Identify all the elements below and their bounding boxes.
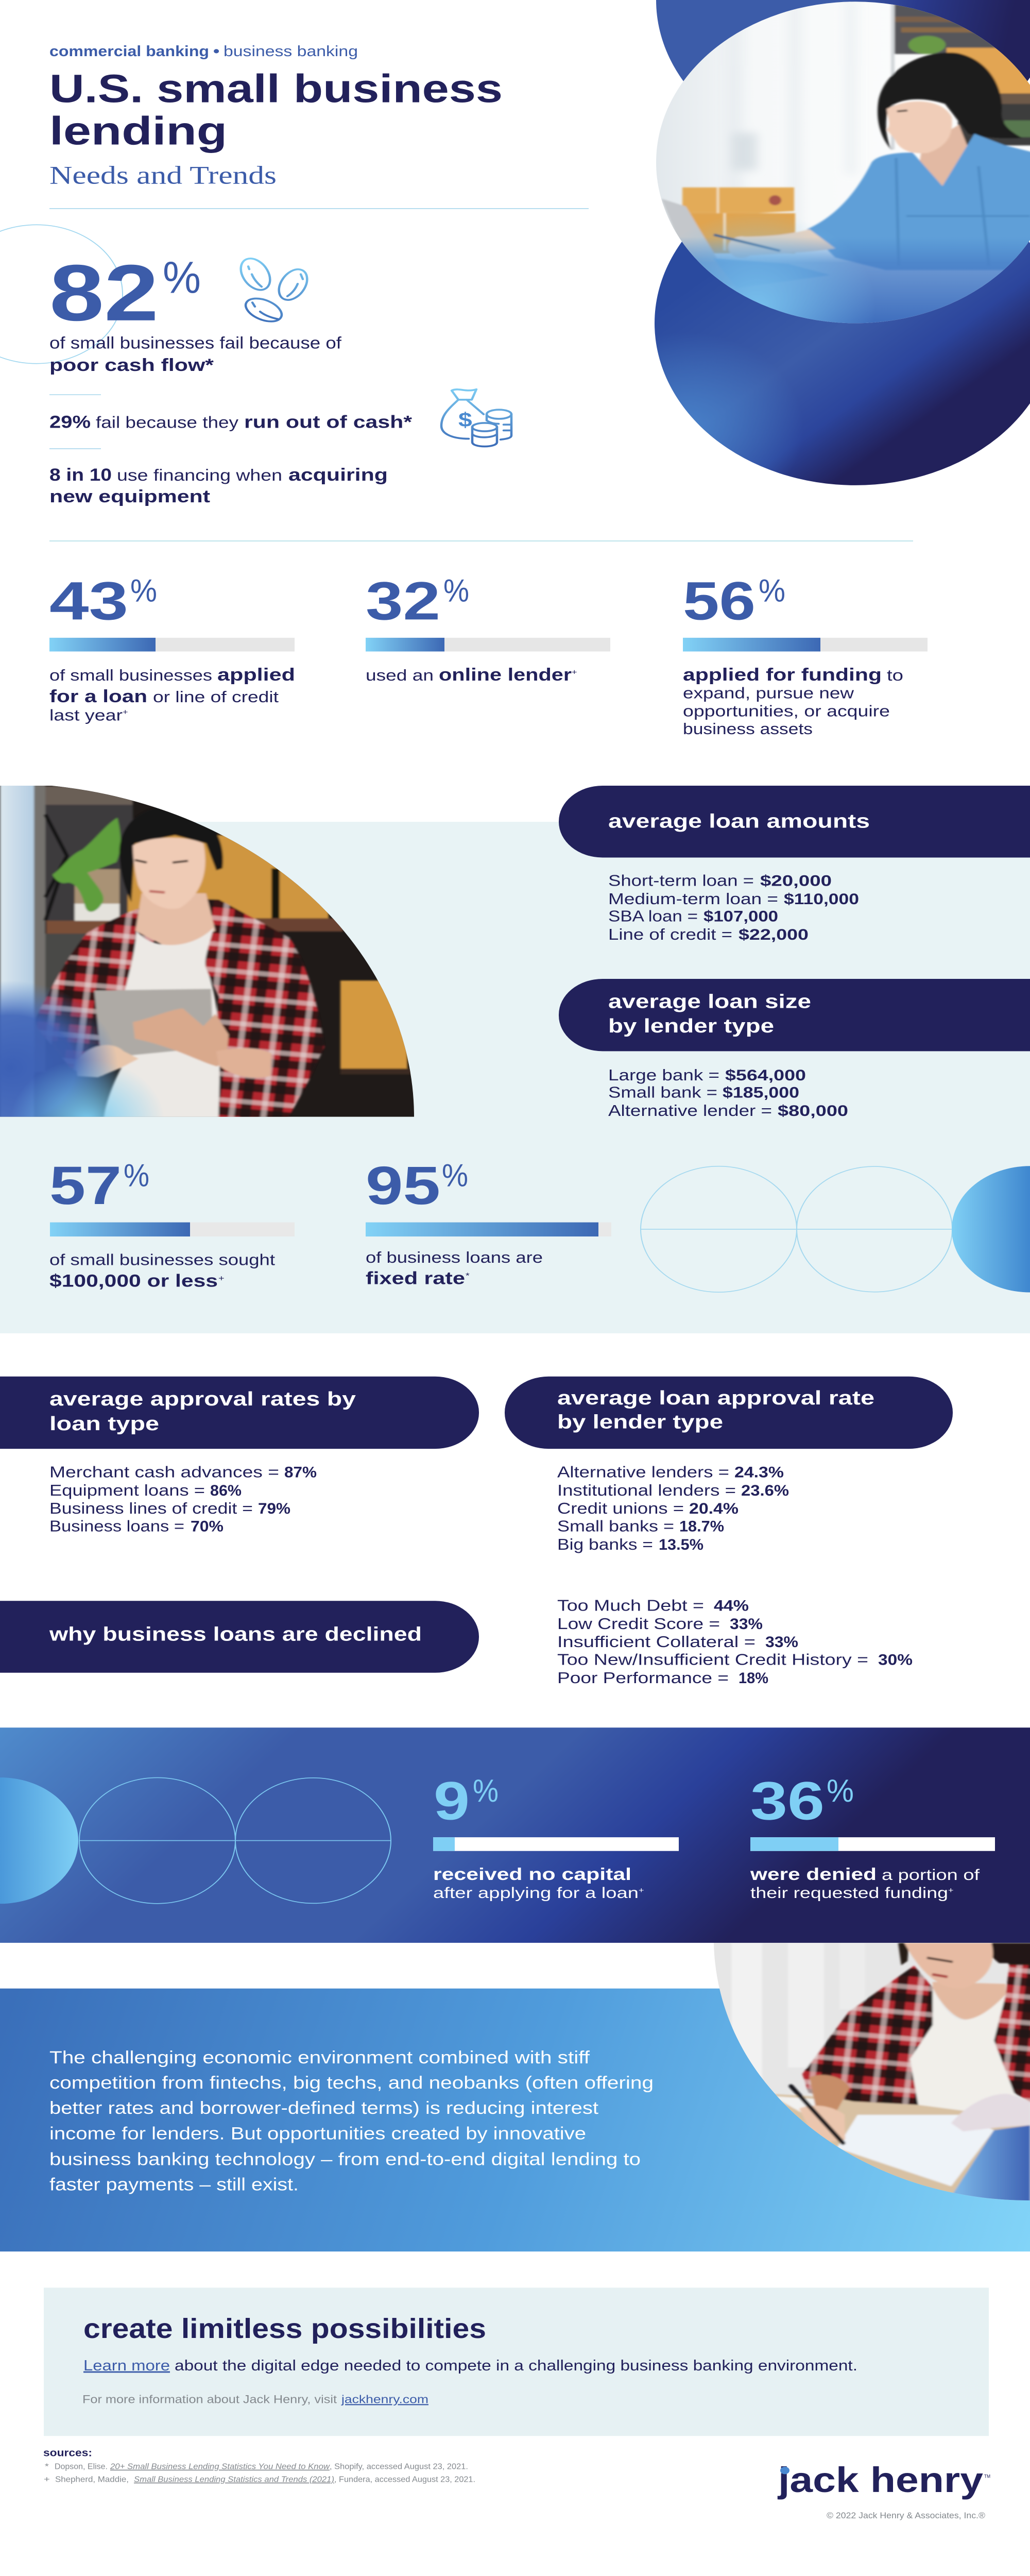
stat: 57%: 57 [49,1156,122,1216]
progress bar 9% [433,1837,679,1851]
laptop [661,199,726,285]
heading pill: average loan approval rate by lender type: by lender type [557,1411,723,1433]
paragraph text: faster payments – still exist. [49,2175,299,2195]
sources: sources: [43,2447,92,2459]
list: approval rates by lender type: Institutional lenders = [557,1482,736,1499]
curtain [0,781,34,1117]
list: average loan amounts [608,872,859,943]
stat: 8 in 10: 8 in 10 [49,465,112,485]
stat: 9%: + [639,1887,644,1895]
list: average loan size: $564,000 [725,1067,806,1084]
list: approval rates by lender type: 23.6% [741,1482,789,1499]
forearm [810,2075,850,2111]
stat: 43%: or line of credit [153,688,279,706]
sources: Small Business Lending Statistics and Trends (2021) [134,2475,334,2484]
paragraph text: income for lenders. But opportunities created by innovative [49,2124,586,2143]
heading pill: average loan size by lender type: by lender type [608,1015,774,1037]
subtitle: Needs and Trends [49,161,277,190]
plaid shirt right [994,1961,1030,2103]
stat: 56%: applied for funding [683,665,882,685]
list: approval rates by loan type: Business lines of credit = [49,1500,253,1517]
blue circle top [656,0,1030,161]
blue circle bottom [655,242,1030,485]
stat: 57%: + [218,1274,225,1283]
stat: 95%: % [442,1157,468,1193]
list: approval rates by loan type: 87% [284,1464,317,1481]
stat: 36%: their requested funding [750,1885,948,1902]
sources: , Shopify, accessed August 23, 2021. [330,2462,468,2471]
list: average loan amounts: Medium-term loan = [608,890,778,908]
paragraph text: business banking technology – from end-to-end digital lending to [49,2149,641,2169]
plaid shirt left [35,906,154,1076]
list: approval rates by lender type: Big banks = [557,1536,653,1553]
stat: 8 in 10: acquiring [288,465,388,485]
stat: 8 in 10: new equipment [49,487,210,506]
panel: blue gradient paragraph [0,1989,1030,2251]
sources [43,2447,475,2484]
contact line: For more information about Jack Henry, visit [82,2394,337,2406]
decorative circles left [0,1777,391,1904]
stat: 43%: applied [217,665,295,685]
boxes [682,188,794,213]
stat: 95%: 95 [366,1156,440,1216]
list: why loans are declined: 44% [714,1598,749,1615]
ponytail and hair [878,53,1022,150]
stat: 56%: 56 [683,571,756,632]
list: why loans are declined: Low Credit Score = [557,1615,720,1633]
eyebrow text: • [213,43,219,59]
list: why loans are declined: Poor Performance = [557,1669,729,1687]
neck [933,1982,1006,2020]
list: average loan size [608,1066,848,1120]
list: average loan amounts: $110,000 [784,891,859,908]
arm [739,229,835,256]
stat: 43% [49,571,295,724]
arms and hands [75,1045,139,1077]
list: average loan size: Alternative lender = [608,1102,772,1120]
list: approval rates by loan type [49,1464,317,1535]
heading pill: average loan amounts: average loan amounts [608,810,870,832]
stat: 32%: online lender [439,665,572,685]
stat: 32%: % [443,573,469,608]
call to action text: about the digital edge needed to compete in a challenging business banking environment. [175,2357,857,2374]
stat: 95%: fixed rate [366,1269,465,1289]
stat: 36% [750,1771,995,1902]
progress bar 32% [366,638,610,652]
blue fade corner [948,2125,1030,2202]
eyebrow text: commercial banking [49,43,209,59]
white tee [910,1988,1017,2113]
stat: 57%: of small businesses sought [49,1251,275,1269]
left hand [951,2094,1030,2131]
stat: 56%: opportunities, or acquire [683,703,890,720]
sources: Shepherd, Maddie, [55,2475,129,2484]
list: why loans are declined: 33% [765,1634,798,1651]
heading pill: average loan size by lender type [559,979,1030,1051]
stat: 32%: used an [366,667,434,684]
stat: 36%: a portion of [882,1867,980,1884]
sources: Dopson, Elise. [55,2462,108,2471]
list: approval rates by loan type: Merchant cash advances = [49,1464,279,1481]
list: average loan amounts: SBA loan = [608,908,698,925]
stat: 82%: 82 [49,248,159,337]
stat: 9%: % [473,1773,499,1808]
stat: 36%: + [948,1887,954,1895]
stat: 56%: to [887,667,903,684]
list: average loan size: $80,000 [778,1103,848,1120]
heading pill: average approval rates by loan type: average approval rates by [49,1388,356,1410]
stat: 43%: 43 [49,571,128,632]
list: approval rates by lender type: 20.4% [689,1500,739,1517]
list: approval rates by loan type: 70% [191,1518,224,1535]
boxes [128,835,329,920]
neck [135,893,215,952]
stat: 8 in 10 [49,465,388,506]
face [887,101,952,153]
stat: 56% [683,571,928,738]
icon: coins [235,255,313,326]
heading pill: why business loans are declined [0,1601,479,1673]
hero image with blue circles [654,0,1030,490]
plaid shirt right [202,899,324,1120]
call to action text: Learn more [83,2357,170,2374]
logo: jack henry: jack henry [777,2461,983,2500]
paragraph text: The challenging economic environment combined with stiff [49,2048,590,2067]
panel: create limitless possibilities [44,2287,989,2436]
list: average loan amounts: $20,000 [760,873,832,889]
title [49,67,503,154]
title: lending [49,109,227,154]
table [772,2094,1030,2202]
stat: 56%: expand, pursue new [683,685,854,702]
list: approval rates by lender type: Credit unions = [557,1500,684,1517]
list: approval rates by loan type: 86% [210,1482,242,1499]
list: approval rates by lender type: Alternative lenders = [557,1464,729,1481]
stat: 9%: after applying for a loan [433,1885,639,1902]
stat: 43%: of small businesses [49,667,212,684]
photo: woman at laptop [654,0,1030,328]
list: why loans are declined [557,1597,913,1687]
list: approval rates by lender type: 13.5% [659,1536,703,1553]
writing hand [799,2106,845,2142]
contact line: jackhenry.com [341,2394,428,2406]
stat: 32%: + [572,668,577,676]
stat: 82% [49,248,342,375]
list: average loan size: $185,000 [723,1084,799,1101]
list: why loans are declined: 30% [878,1652,913,1669]
icon: money bag and coins [441,389,511,447]
heading pill: average approval rates by loan type: loan type [49,1413,159,1435]
photo: woman writing [711,1943,1030,2205]
heading: create limitless possibilities [83,2313,486,2344]
list: average loan amounts: Short-term loan = [608,872,754,889]
stat: 57%: $100,000 or less [49,1271,218,1291]
list: approval rates by lender type: 18.7% [679,1518,724,1535]
title: U.S. small business [49,67,503,111]
heading pill: average approval rates by loan type [0,1377,479,1449]
paragraph text: competition from fintechs, big techs, and neobanks (often offering [49,2073,654,2093]
stat: 8 in 10: use financing when [117,466,282,484]
list: average loan size: Small bank = [608,1084,717,1101]
progress bar 56% [683,638,928,652]
progress bar 95% [366,1223,611,1236]
paragraph text [49,2048,654,2195]
stat: 56%: % [759,573,785,608]
heading pill: average loan approval rate by lender type: average loan approval rate [557,1387,874,1409]
shirt [807,134,1030,270]
progress bar 36% [750,1837,995,1851]
heading pill: average loan approval rate by lender type [505,1377,953,1449]
stat: 95% [366,1156,611,1289]
decorative circles right [641,1166,1030,1292]
white tee [104,927,219,1120]
progress bar 43% [49,638,295,652]
list: approval rates by loan type: Equipment loans = [49,1482,205,1499]
stat: 36%: 36 [750,1771,825,1832]
stat: 43%: for a loan [49,687,147,706]
stat: 32%: 32 [366,571,440,632]
sources: 20+ Small Business Lending Statistics You Need to Know [110,2462,331,2471]
stat: 82%: of small businesses fail because of [49,333,342,352]
sources: + [44,2475,50,2484]
hair [119,805,223,903]
stat: 29% run out of cash: run out of cash* [244,412,412,432]
stat: 36%: % [827,1773,854,1808]
list: why loans are declined: 33% [730,1616,763,1633]
panel: dark gradient band [0,1727,1030,1943]
progress bar 57% [50,1223,295,1236]
list: average loan amounts: $107,000 [703,908,778,925]
list: why loans are declined: 18% [739,1670,768,1687]
stat: 9%: 9 [434,1771,470,1832]
eyebrow text [49,43,358,59]
panel: loan size background [0,822,1030,1333]
stat: 56%: business assets [683,720,813,738]
tablet [94,989,213,1058]
list: why loans are declined: Too Much Debt = [557,1597,704,1615]
photo: woman with tablet [0,781,417,1122]
stat: 9%: received no capital [433,1865,631,1884]
face [904,1943,993,1988]
list: approval rates by lender type: 24.3% [734,1464,784,1481]
face [133,838,205,909]
stat: 43%: last year [49,707,123,724]
list: approval rates by lender type: Small banks = [557,1518,674,1535]
copyright: © 2022 Jack Henry & Associates, Inc.® [827,2511,985,2520]
paper [837,2115,994,2187]
stat: 82%: poor cash flow* [49,355,214,375]
list: approval rates by lender type [557,1464,789,1553]
logo: jack henry: TM [984,2475,990,2479]
stat: 29% run out of cash [49,412,412,432]
stat: 95%: of business loans are [366,1249,543,1266]
list: average loan amounts: Line of credit = [608,926,732,943]
stat: 57% [49,1156,295,1291]
heading pill: average loan amounts [559,786,1030,858]
paragraph text: better rates and borrower-defined terms) is reducing interest [49,2098,598,2118]
list: average loan amounts: $22,000 [739,926,809,943]
pen [791,2086,843,2143]
sources: * [45,2462,49,2471]
eyebrow text: business banking [224,43,358,59]
heading pill: why business loans are declined: why business loans are declined [49,1623,422,1646]
list: approval rates by loan type: 79% [258,1500,290,1517]
stat: 57%: % [124,1157,149,1193]
stat: 32% [366,571,610,685]
icon: money bag and coins: $ [458,409,472,431]
neck [919,125,971,187]
sources: , Fundera, accessed August 23, 2021. [334,2475,475,2484]
heading pill: average loan size by lender type: average loan size [608,991,811,1012]
plant and pot [75,869,119,921]
stat: 36%: were denied [750,1865,877,1884]
list: approval rates by loan type: Business loans = [49,1518,184,1535]
list: why loans are declined: Insufficient Collateral = [557,1633,756,1651]
list: why loans are declined: Too New/Insufficient Credit History = [557,1651,868,1669]
hair [898,1943,1030,1965]
plaid shirt left [802,1965,933,2105]
stat: 29% run out of cash: fail because they [96,413,238,432]
stat: 95%: * [466,1271,470,1280]
stat: 9% [433,1771,679,1902]
list: average loan size: Large bank = [608,1066,719,1084]
stat: 43%: + [123,708,128,717]
stat: 82%: % [163,252,201,302]
stat: 43%: % [130,573,157,608]
stat: 29% run out of cash: 29% [49,412,91,432]
